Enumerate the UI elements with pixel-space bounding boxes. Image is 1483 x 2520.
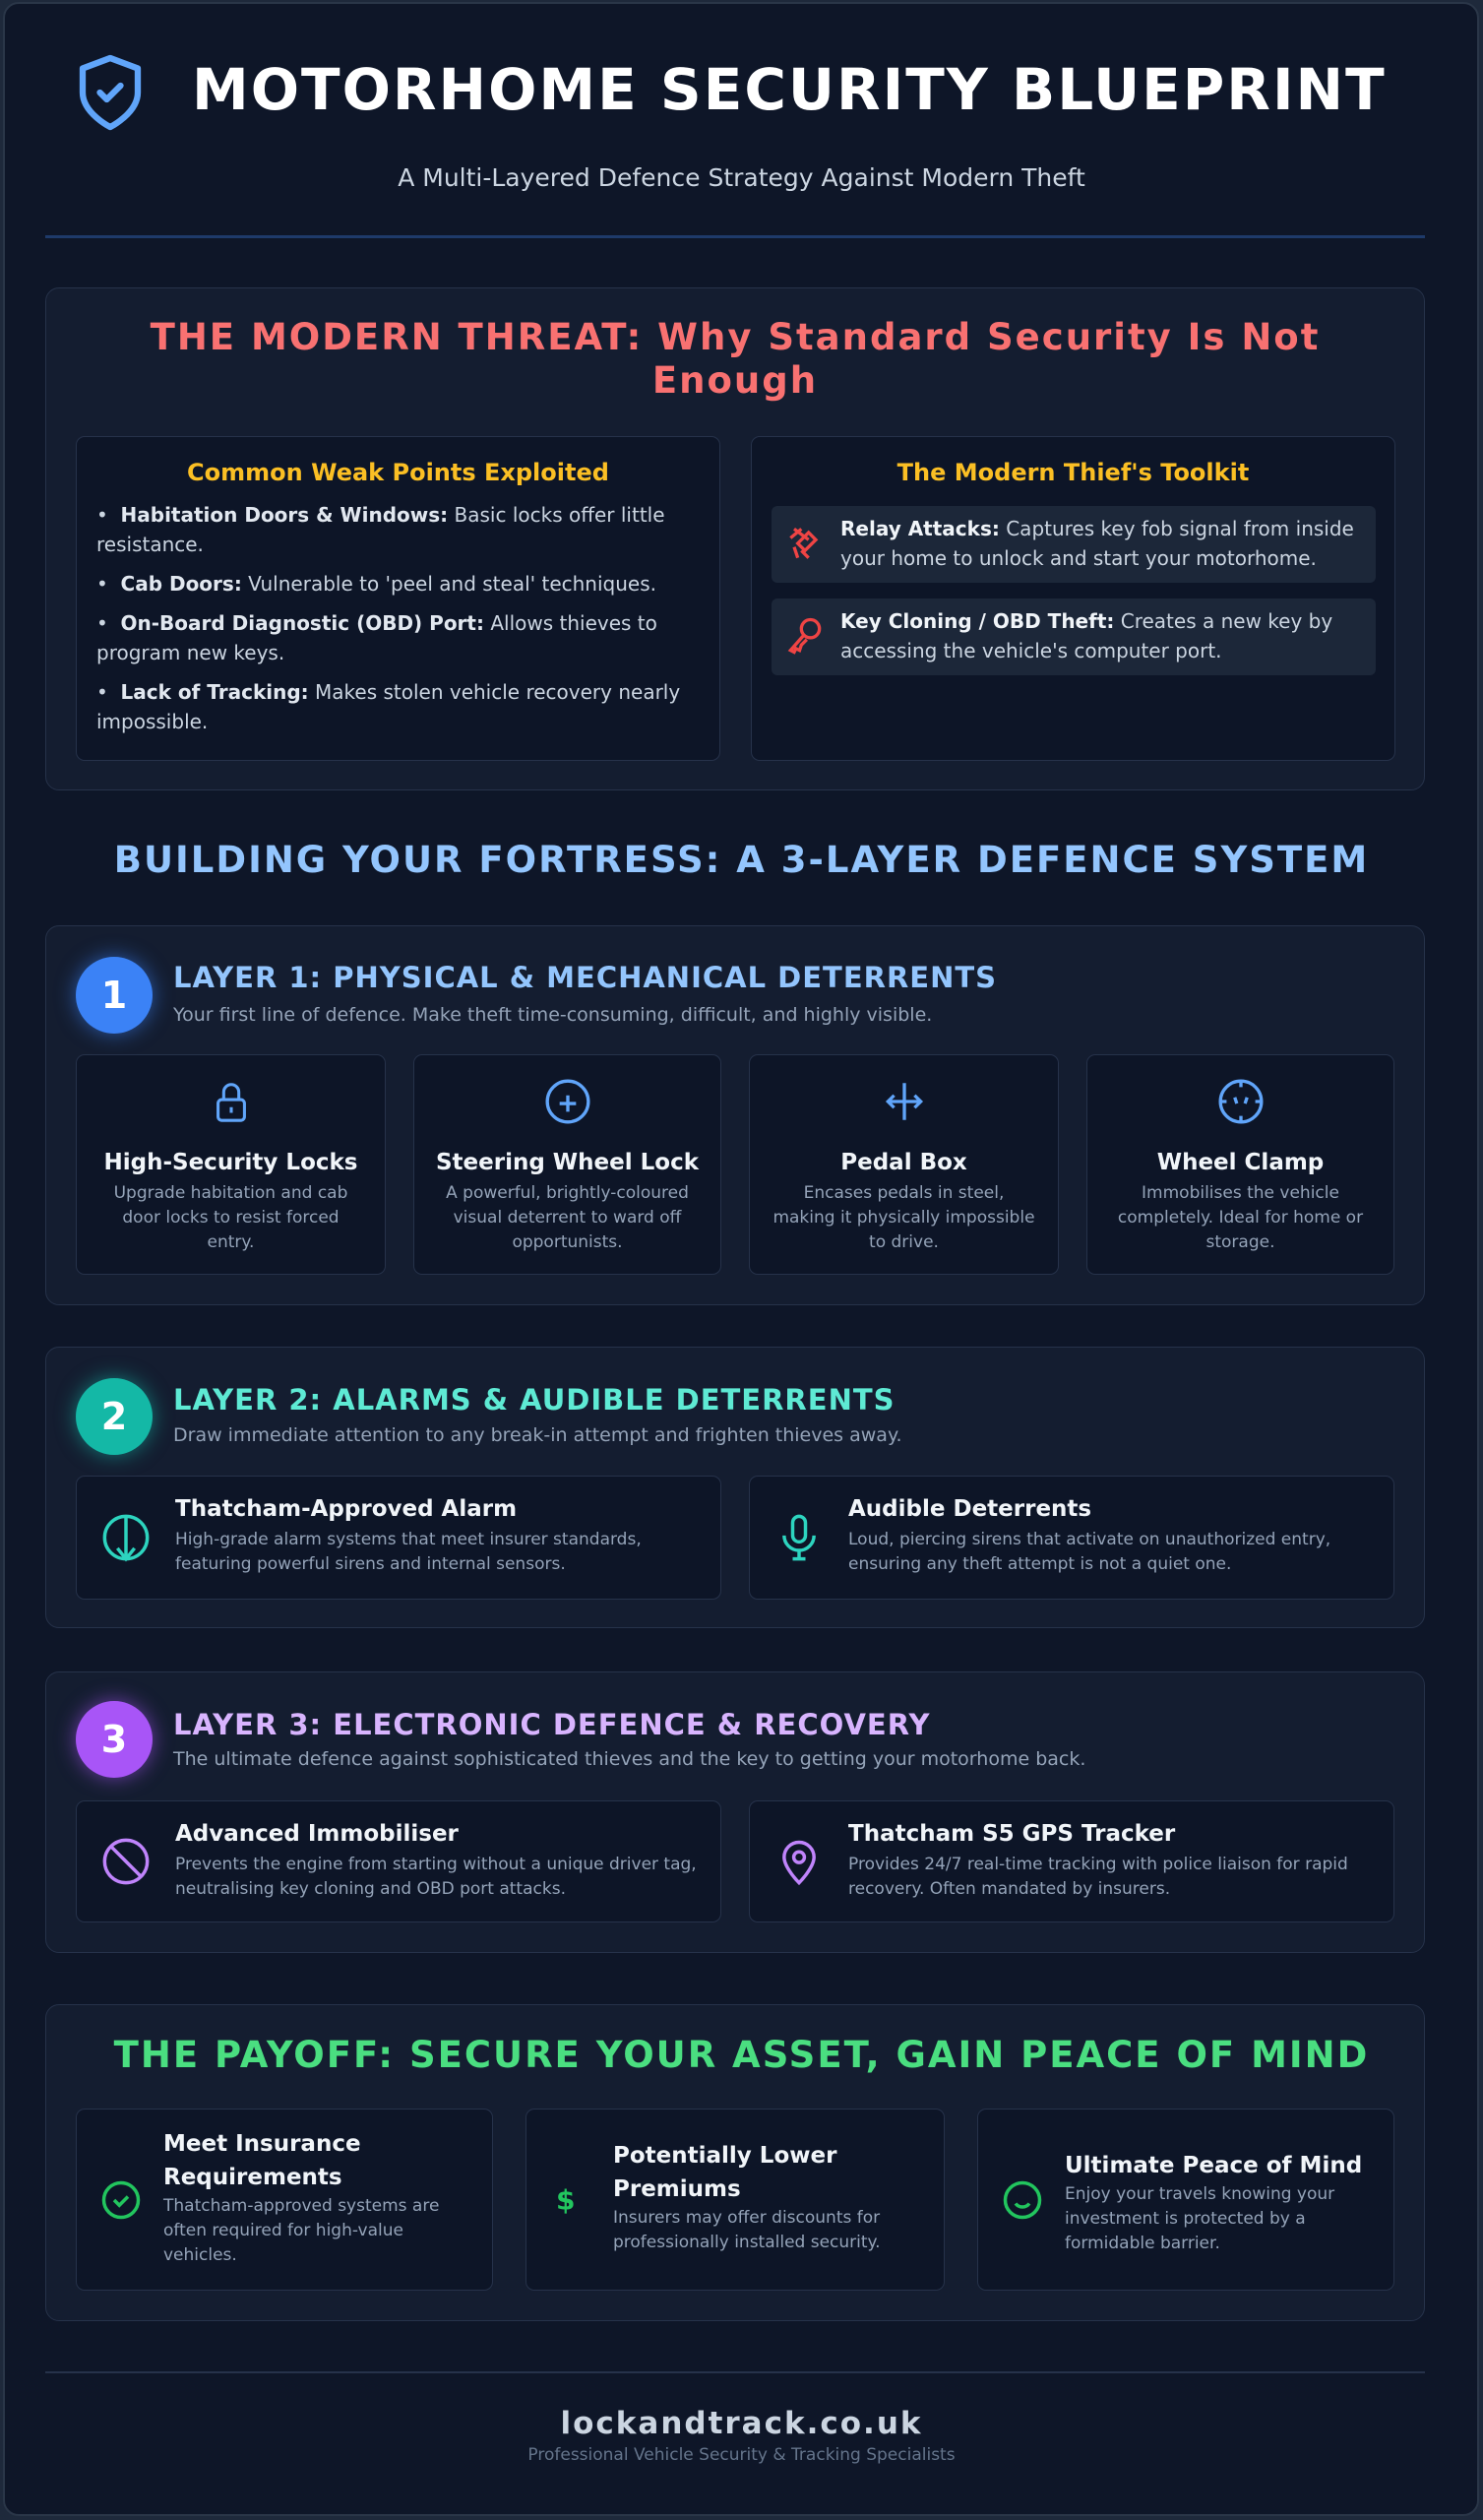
card: peace of mind: Enjoy your travels knowing your investment is protected by a formidable barrier. [1065, 2184, 1334, 2253]
panel: layer 2 [45, 1347, 1425, 1628]
badge 1 [76, 957, 153, 1034]
card: weak points: • Cab Doors: Vulnerable to 'peel and steal' techniques. [96, 572, 656, 596]
header: shield icon [79, 55, 142, 130]
toolkit item: key cloning [772, 598, 1376, 675]
panel: layer 3 [45, 1671, 1425, 1953]
toolkit item: relay [772, 506, 1376, 583]
card: premiums: $ [556, 2183, 575, 2216]
card: wheel clamp [1086, 1054, 1394, 1275]
card: insurance [76, 2109, 493, 2291]
card: toolkit [751, 436, 1395, 761]
subtitle: A Multi-Layered Defence Strategy Against Modern Theft [398, 163, 1085, 192]
section heading: BUILDING YOUR FORTRESS: A 3-LAYER DEFENCE SYSTEM [114, 839, 1369, 881]
card: pedal box: making it physically impossible to drive. [772, 1208, 1035, 1252]
footer url: lockandtrack.co.uk [560, 2406, 923, 2441]
payoff title: THE PAYOFF: SECURE YOUR ASSET, GAIN PEACE OF MIND [114, 2034, 1369, 2076]
card: locks [76, 1054, 386, 1275]
card: premiums [525, 2109, 945, 2291]
card: locks: High-Security Locks [104, 1150, 358, 1175]
card: peace of mind: Ultimate Peace of Mind [1065, 2153, 1362, 2178]
card: toolkit: The Modern Thief's Toolkit [897, 459, 1249, 486]
card: wheel clamp: Immobilises the vehicle completely. Ideal for home or storage. [1118, 1183, 1363, 1252]
panel: modern threat [45, 287, 1425, 790]
card: weak points [76, 436, 720, 761]
card: audible [749, 1476, 1394, 1600]
card: audible: Loud, piercing sirens that activate on unauthorized entry, ensuring any theft attempt is not a quiet one. [848, 1530, 1330, 1574]
layer 3 desc: The ultimate defence against sophisticated thieves and the key to getting your motorhome back. [173, 1748, 1085, 1770]
layer 1 desc: Your first line of defence. Make theft time-consuming, difficult, and highly visible. [173, 1004, 932, 1026]
card: wheel clamp: Wheel Clamp [1157, 1150, 1324, 1175]
card: premiums: Potentially Lower Premiums [613, 2143, 836, 2202]
card: steering: Steering Wheel Lock [436, 1150, 699, 1175]
card: immobiliser [76, 1800, 721, 1922]
badge 3 [76, 1701, 153, 1778]
card: alarm: High-grade alarm systems that meet insurer standards, featuring powerful sirens and internal sensors. [175, 1530, 642, 1574]
card: alarm [76, 1476, 721, 1600]
layer 1 title: LAYER 1: PHYSICAL & MECHANICAL DETERRENTS [173, 961, 997, 994]
card: peace of mind [977, 2109, 1394, 2291]
toolkit item: relay: Relay Attacks: Captures key fob signal from inside your home to unlock and start your motorhome. [840, 517, 1354, 570]
card: insurance: Thatcham-approved systems are often required for high-value vehicles. [163, 2196, 439, 2265]
card: pedal box: Pedal Box [840, 1150, 967, 1175]
card: pedal box [749, 1054, 1059, 1275]
card: weak points: • On-Board Diagnostic (OBD) Port: Allows thieves to program new keys. [96, 611, 657, 664]
card: tracker: Thatcham S5 GPS Tracker [848, 1821, 1175, 1847]
badge 3: 3 [101, 1718, 127, 1761]
card: immobiliser: Advanced Immobiliser [175, 1821, 459, 1847]
card: alarm: Thatcham-Approved Alarm [175, 1496, 517, 1522]
card: insurance: Meet Insurance Requirements [163, 2131, 361, 2190]
card: steering: A powerful, brightly-coloured visual deterrent to ward off opportunists. [446, 1183, 689, 1252]
layer 2 desc: Draw immediate attention to any break-in attempt and frighten thieves away. [173, 1424, 902, 1446]
panel: layer 1 [45, 925, 1425, 1305]
card: pedal box: Encases pedals in steel, [804, 1183, 1004, 1203]
title: MOTORHOME SECURITY BLUEPRINT [192, 56, 1387, 123]
toolkit item: key cloning: Key Cloning / OBD Theft: Creates a new key by accessing the vehicle's computer port. [840, 609, 1332, 662]
card: tracker: Provides 24/7 real-time tracking with police liaison for rapid recovery. Often mandated by insurers. [848, 1855, 1348, 1899]
card: steering [413, 1054, 721, 1275]
card: audible: Audible Deterrents [848, 1496, 1091, 1522]
card: immobiliser: Prevents the engine from starting without a unique driver tag, neutralising key cloning and OBD port attacks. [175, 1855, 697, 1899]
threat heading: THE MODERN THREAT: Why Standard Security Is Not Enough [151, 316, 1320, 402]
card: weak points: • Lack of Tracking: Makes stolen vehicle recovery nearly impossible. [96, 680, 680, 733]
badge 1: 1 [101, 974, 127, 1017]
card: premiums: Insurers may offer discounts for professionally installed security. [613, 2208, 881, 2252]
card: weak points: Common Weak Points Exploited [187, 459, 609, 486]
panel: payoff [45, 2004, 1425, 2321]
layer 3 title: LAYER 3: ELECTRONIC DEFENCE & RECOVERY [173, 1708, 931, 1741]
footer tagline: Professional Vehicle Security & Tracking Specialists [527, 2445, 956, 2465]
card: tracker [749, 1800, 1394, 1922]
card: locks: Upgrade habitation and cab door locks to resist forced entry. [114, 1183, 347, 1252]
layer 2 title: LAYER 2: ALARMS & AUDIBLE DETERRENTS [173, 1383, 896, 1417]
badge 2: 2 [101, 1395, 127, 1438]
badge 2 [76, 1378, 153, 1455]
card: weak points: • Habitation Doors & Windows: Basic locks offer little resistance. [96, 503, 665, 556]
